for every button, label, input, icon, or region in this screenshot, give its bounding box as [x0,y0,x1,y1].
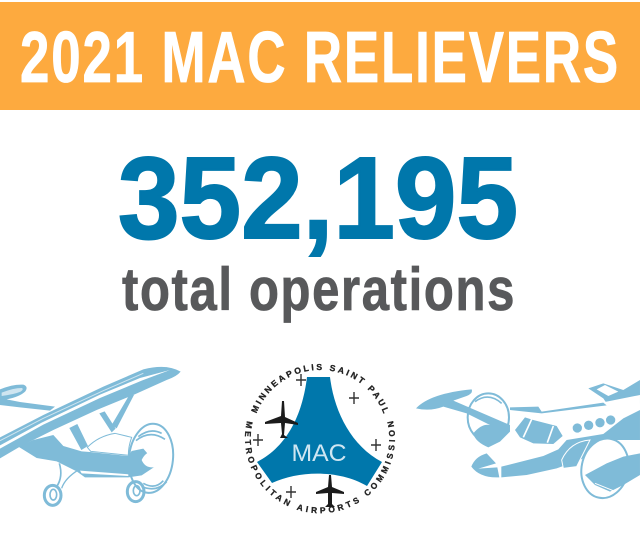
struts [69,424,88,450]
left propeller [468,393,509,441]
wing [0,367,181,458]
cabin windows [573,423,582,433]
total label: total operations [122,256,516,323]
logo: Metropolitan Airports Commission [244,364,396,514]
logo emblem [257,377,382,486]
icon: single-engine plane [0,367,181,505]
logo planes [265,401,344,507]
cockpit [515,417,563,444]
lower fuselage [501,410,640,477]
total figure: 352,195 [118,133,518,263]
fuselage [472,395,640,478]
logo initials: MAC [292,440,346,467]
right propeller [576,434,634,503]
spinner [142,452,166,467]
left wing [416,389,510,447]
propeller disc [125,422,176,495]
tail [588,380,640,403]
logo ring text: MINNEAPOLIS SAINT PAUL [251,364,388,414]
cowl [87,433,132,455]
logo lower ring text: METROPOLITAN AIRPORTS COMMISSION [244,421,396,514]
body [18,435,157,477]
icon: twin-engine plane [416,380,640,503]
logo stars [253,374,381,498]
nose [471,453,499,477]
landing gear [44,463,144,505]
tail [0,385,55,411]
title banner [0,2,640,110]
